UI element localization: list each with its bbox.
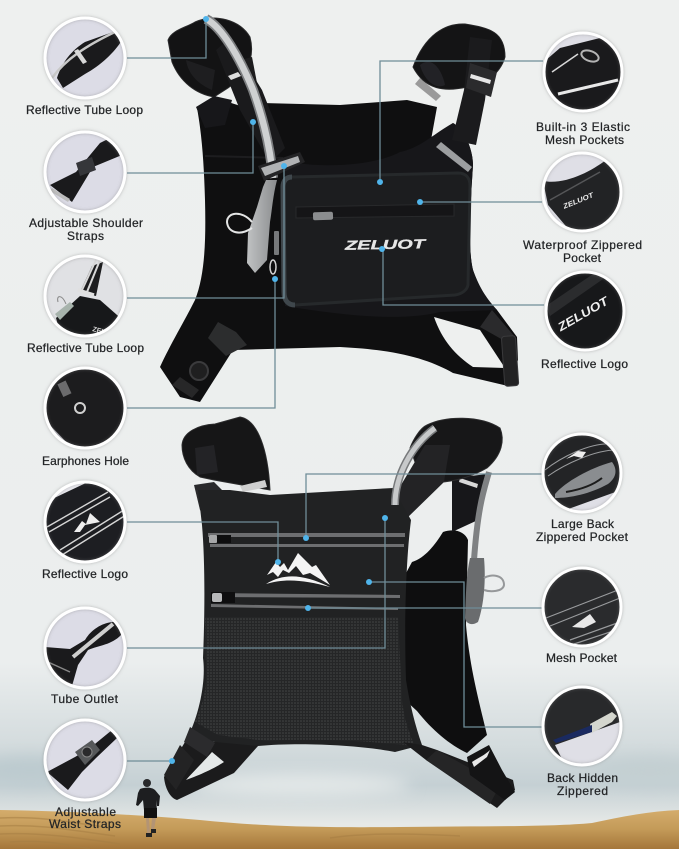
callout: back hidden zippered: Zippered — [557, 784, 608, 798]
lower right strap piece — [480, 310, 515, 340]
pad link — [196, 96, 232, 128]
callout: reflective tube loop (top): Reflective Tube Loop — [26, 103, 143, 117]
right shoulder pad — [413, 24, 505, 89]
mountain logo — [266, 553, 330, 587]
reflective band right — [436, 142, 472, 172]
left shoulder pad — [168, 18, 252, 97]
callout: reflective logo (front): Reflective Logo — [541, 357, 628, 371]
callout: reflective logo (front) — [541, 272, 628, 371]
callout: adjustable shoulder straps: Straps — [67, 229, 104, 243]
callout: built-in 3 elastic mesh pockets: Built-in 3 Elastic — [536, 120, 630, 134]
side panel — [405, 530, 487, 753]
callout: mesh pocket: Mesh Pocket — [546, 651, 618, 665]
bite valve — [465, 558, 485, 624]
lower zipper — [211, 593, 400, 610]
right shoulder strap — [452, 37, 492, 145]
right shoulder link — [415, 78, 441, 101]
callout: large back zippered pocket: Zippered Pocket — [536, 530, 629, 544]
product: back view of vest — [164, 417, 515, 808]
callout: reflective tube loop (top) — [26, 18, 143, 117]
callout: back hidden zippered — [543, 687, 621, 798]
callout: reflective logo (back) — [42, 482, 128, 581]
callout: waterproof zippered pocket: ZELUOT — [561, 192, 595, 211]
gap inside lower right strap — [434, 317, 505, 368]
left shoulder pad — [182, 417, 270, 490]
callout: waterproof zippered pocket — [523, 153, 642, 265]
runner — [136, 779, 160, 837]
callout: large back zippered pocket — [536, 434, 629, 544]
logo: ZELUOT: ZELUOT — [343, 236, 427, 253]
callout: reflective tube loop (middle): Reflective Tube Loop — [27, 341, 144, 355]
callout: back hidden zippered: Back Hidden — [547, 771, 618, 785]
callout: reflective logo (front): ZELUOT — [554, 293, 612, 335]
left shoulder strap — [216, 38, 285, 163]
connector lines with blue dots — [127, 16, 544, 764]
front zip pocket — [283, 173, 470, 305]
lower right buckle — [501, 336, 519, 386]
callout: mesh pocket — [543, 568, 622, 665]
callout: waterproof zippered pocket: Pocket — [563, 251, 602, 265]
main body — [188, 488, 422, 762]
callout: earphones hole: Earphones Hole — [42, 454, 129, 468]
callout: large back zippered pocket: Large Back — [551, 517, 615, 531]
callout: tube outlet — [45, 608, 125, 706]
callout: earphones hole — [42, 368, 129, 468]
lower left strap loop — [164, 737, 258, 800]
callout: adjustable waist straps — [45, 720, 125, 831]
lower left strap details — [208, 322, 247, 356]
right shoulder pad — [410, 418, 502, 490]
callout: adjustable waist straps: Waist Straps — [49, 817, 121, 831]
mesh pocket — [195, 617, 415, 746]
callout: waterproof zippered pocket: Waterproof Zippered — [523, 238, 642, 252]
callout: reflective tube loop (middle): ZEL — [91, 326, 107, 337]
callout: reflective tube loop (middle) — [27, 256, 144, 355]
body silhouette — [160, 100, 518, 402]
lower right strap — [403, 742, 515, 808]
reflective tube loop — [258, 152, 305, 181]
upper zipper — [208, 533, 405, 547]
callout: adjustable waist straps: Adjustable — [55, 805, 116, 819]
tube — [206, 19, 273, 178]
product: front view of vest — [160, 18, 519, 402]
callout: built-in 3 elastic mesh pockets — [536, 33, 630, 147]
callout: adjustable shoulder straps: Adjustable Shoulder — [29, 216, 143, 230]
callout: adjustable shoulder straps — [29, 132, 143, 243]
callout: reflective logo (back): Reflective Logo — [42, 567, 128, 581]
front panel shading — [283, 123, 497, 317]
callout: tube outlet: Tube Outlet — [51, 692, 119, 706]
bite valve — [247, 180, 277, 273]
rear strap right — [452, 474, 488, 532]
callout: built-in 3 elastic mesh pockets: Mesh Pockets — [545, 133, 624, 147]
tube — [395, 428, 435, 505]
